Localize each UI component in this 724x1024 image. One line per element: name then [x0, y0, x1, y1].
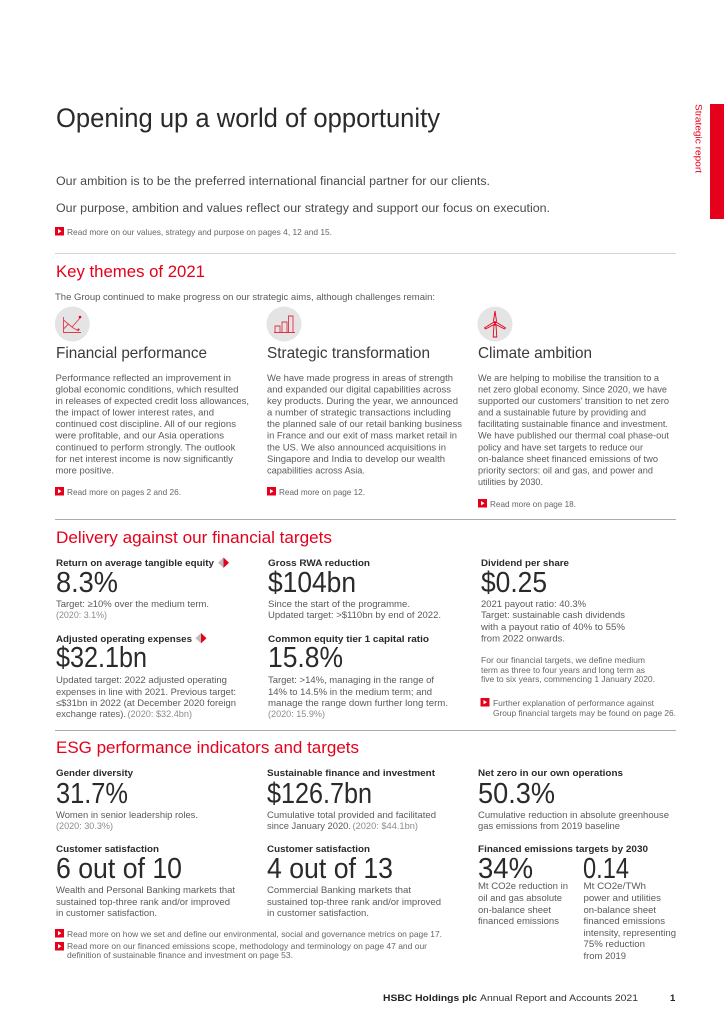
title: Opening up a world of opportunity [56, 103, 441, 133]
metric: net zero: Cumulative reduction in absolute greenhouse [478, 810, 669, 820]
column: climate ambition: Climate ambition [478, 345, 592, 362]
read more link: values: Read more on our values, strategy and purpose on pages 4, 12 and 15. [67, 228, 332, 237]
metric: gross RWA reduction: Updated target: >$110bn by end of 2022. [268, 610, 441, 620]
side tab: Strategic report [694, 104, 704, 174]
metric: financed emissions targets: on-balance sheet [584, 905, 656, 915]
column: climate ambition: priority sectors: oil and gas, and power and [478, 465, 653, 475]
metric: customer satisfaction, commercial: Customer satisfaction [267, 844, 370, 854]
metric: financed emissions targets: financed emissions [478, 916, 559, 926]
metric: dividend per share: $0.25 [481, 567, 547, 599]
column: strategic transformation: capabilities across Asia. [267, 465, 365, 475]
metric: financed emissions targets: financed emissions [584, 916, 665, 926]
metric: sustainable finance: (2020: $44.1bn) [352, 821, 418, 831]
metric: customer satisfaction, wealth: Customer satisfaction [56, 844, 159, 854]
intro text: Our purpose, ambition and values reflect our strategy and support our focus on execution. [56, 203, 550, 215]
metric: financed emissions targets: from 2019 [584, 951, 626, 961]
panel: key themes of 2021 [54, 262, 669, 509]
metric: financed emissions targets [478, 844, 676, 961]
footer: Annual Report and Accounts 2021 [480, 993, 638, 1004]
metric: financed emissions targets: on-balance sheet [478, 905, 551, 915]
metric: adjusted operating expenses: (2020: $32.4bn) [128, 709, 192, 719]
metric: return on tangible equity: 8.3% [56, 567, 118, 599]
read more link: financed emissions: definition of sustainable finance and investment on page 53. [67, 951, 293, 960]
metric: customer satisfaction, wealth: in customer satisfaction. [56, 908, 157, 918]
note: medium and long term definition: term as three to four years and long term as [481, 666, 645, 675]
column: strategic transformation: and expanded our digital capabilities across [267, 385, 451, 395]
panel: ESG performance indicators [55, 738, 676, 961]
metric: financed emissions targets: power and utilities [584, 893, 661, 903]
column: strategic transformation [267, 345, 462, 475]
read more link: page 26: Group financial targets may be found on page 26. [493, 709, 676, 718]
metric: adjusted operating expenses: expenses in line with 2021. Previous target: [56, 687, 236, 697]
column: financial performance: the impact of lower interest rates, and [56, 408, 214, 418]
metric: sustainable finance: Cumulative total provided and facilitated [267, 810, 436, 820]
column: financial performance: global economic conditions, which resulted [56, 385, 238, 395]
column: financial performance: continued to perform strongly. The outlook [56, 442, 236, 452]
metric: gross RWA reduction: Since the start of the programme. [268, 599, 410, 609]
metric: common equity tier 1: Common equity tier 1 capital ratio [268, 634, 430, 644]
note: medium and long term definition: five to six years, commencing 1 January 2020. [481, 675, 655, 684]
note: medium and long term definition [481, 656, 655, 684]
heading: key themes: Key themes of 2021 [56, 262, 205, 281]
metric: return on tangible equity: (2020: 3.1%) [56, 610, 107, 620]
metric: common equity tier 1 [268, 634, 448, 719]
metric: financed emissions targets: Financed emissions targets by 2030 [478, 844, 648, 854]
column: climate ambition: We are helping to mobilise the transition to a [478, 373, 660, 383]
read more link: page 18: Read more on page 18. [490, 500, 576, 509]
column: climate ambition [478, 345, 669, 487]
metric: adjusted operating expenses: exchange rates). [56, 709, 126, 719]
column: climate ambition: supported our customers’ transition to net zero [478, 396, 669, 406]
metric: net zero [478, 768, 669, 831]
metric: dividend per share: Dividend per share [481, 558, 569, 568]
metric: gross RWA reduction: $104bn [268, 567, 356, 599]
panel: delivery against financial targets [56, 528, 676, 719]
metric: gross RWA reduction: Gross RWA reduction [268, 558, 370, 568]
metric: financed emissions targets: oil and gas absolute [478, 893, 562, 903]
column: climate ambition: and a sustainable future by providing and [478, 408, 646, 418]
metric: dividend per share: with a payout ratio of 40% to 55% [480, 622, 625, 632]
column: strategic transformation: the US. We also announced acquisitions in [267, 442, 446, 452]
metric: dividend per share: Target: sustainable cash dividends [481, 610, 625, 620]
metric: sustainable finance: Sustainable finance and investment [267, 768, 435, 778]
metric: dividend per share: 2021 payout ratio: 40.3% [481, 599, 586, 609]
metric: sustainable finance: $126.7bn [267, 778, 372, 810]
column: strategic transformation: We have made progress in areas of strength [267, 373, 453, 383]
column: climate ambition: utilities by 2030. [478, 477, 543, 487]
metric: adjusted operating expenses: $32.1bn [56, 642, 147, 674]
metric: customer satisfaction, commercial [267, 844, 441, 918]
metric: customer satisfaction, commercial: sustained top-three rank and/or improved [267, 897, 441, 907]
column: financial performance: in releases of expected credit loss allowances, [56, 396, 249, 406]
metric: sustainable finance [267, 768, 436, 831]
column: strategic transformation: the planned sale of our retail banking business [267, 419, 462, 429]
metric: dividend per share [480, 558, 625, 644]
side tab [694, 104, 724, 219]
heading: delivery: Delivery against our financial targets [56, 528, 332, 547]
metric: financed emissions targets: 0.14 [583, 853, 629, 885]
read more link: page 26: Further explanation of performance against [493, 699, 655, 708]
intro text [56, 176, 550, 215]
column: financial performance: more positive. [56, 465, 114, 475]
column: strategic transformation: a number of strategic transactions including [267, 408, 451, 418]
column: financial performance: Performance reflected an improvement in [56, 373, 231, 383]
metric: financed emissions targets: intensity, representing [584, 928, 676, 938]
icon: line chart [55, 306, 90, 342]
column: climate ambition: We have published our thermal coal phase-out [478, 431, 669, 441]
footer: HSBC Holdings plc [383, 993, 477, 1004]
metric: adjusted operating expenses: ≤$31bn in 2022 (at December 2020 foreign [56, 698, 236, 708]
footer: 1 [670, 993, 676, 1004]
metric: return on tangible equity: Return on average tangible equity [56, 558, 214, 568]
column: strategic transformation: in France and our exit of mass market retail in [267, 431, 457, 441]
column: strategic transformation: Singapore and India to develop our wealth [267, 454, 445, 464]
metric: net zero: Net zero in our own operations [478, 768, 623, 778]
metric: return on tangible equity: Target: ≥10% over the medium term. [56, 599, 209, 609]
read more link: ESG metrics: Read more on how we set and define our environmental, social and governance metrics on page 17. [67, 930, 442, 939]
icon: bar chart [266, 306, 302, 342]
column: financial performance [54, 345, 249, 475]
metric: common equity tier 1: (2020: 15.9%) [268, 709, 325, 719]
metric: gender diversity: Gender diversity [56, 768, 133, 778]
read more link: pages 2 and 26: Read more on pages 2 and 26. [67, 488, 181, 497]
column: strategic transformation: key products. During the year, we announced [267, 396, 458, 406]
metric: customer satisfaction, wealth [56, 844, 235, 918]
column: climate ambition: policy and have set targets to reduce our [478, 442, 643, 452]
metric: customer satisfaction, commercial: 4 out of 13 [267, 853, 393, 885]
column: climate ambition: facilitating sustainable finance and investment. [478, 419, 668, 429]
metric: net zero: gas emissions from 2019 baseline [478, 821, 620, 831]
column: financial performance: Financial performance [56, 345, 207, 362]
metric: customer satisfaction, commercial: Commercial Banking markets that [267, 885, 411, 895]
metric: adjusted operating expenses: Updated target: 2022 adjusted operating [56, 675, 227, 685]
metric: sustainable finance: since January 2020. [267, 821, 351, 831]
metric: common equity tier 1: 15.8% [268, 642, 343, 674]
footer [383, 993, 676, 1004]
intro text: Our ambition is to be the preferred international financial partner for our clients. [56, 176, 490, 188]
metric: gender diversity: Women in senior leadership roles. [56, 810, 198, 820]
column: climate ambition: on-balance sheet financed emissions of two [478, 454, 658, 464]
metric: common equity tier 1: manage the range down further long term. [268, 698, 448, 708]
metric: common equity tier 1: Target: >14%, managing in the range of [268, 675, 434, 685]
metric: return on tangible equity [56, 558, 229, 620]
column: climate ambition: net zero global economy. Since 2020, we have [478, 385, 667, 395]
metric: gross RWA reduction [268, 558, 441, 620]
metric: dividend per share: from 2022 onwards. [481, 634, 565, 644]
column: financial performance: continued cost discipline. All of our regions [56, 419, 236, 429]
metric: financed emissions targets: Mt CO2e/TWh [584, 881, 646, 891]
metric: gender diversity [56, 768, 198, 831]
read more link: financed emissions [55, 942, 427, 960]
read more link: financed emissions: Read more on our financed emissions scope, methodology and terminology on page 47 and our [67, 942, 427, 951]
metric: financed emissions targets: 34% [478, 853, 533, 885]
metric: financed emissions targets: 75% reduction [584, 939, 645, 949]
key themes intro: The Group continued to make progress on our strategic aims, although challenges remain: [55, 292, 435, 302]
metric: customer satisfaction, wealth: 6 out of 10 [56, 853, 182, 885]
metric: financed emissions targets: Mt CO2e reduction in [478, 881, 568, 891]
heading: ESG: ESG performance indicators and targets [56, 738, 359, 757]
metric: gender diversity: 31.7% [56, 778, 128, 810]
metric: common equity tier 1: 14% to 14.5% in the medium term; and [268, 687, 432, 697]
column: financial performance: were profitable, and our Asia operations [54, 431, 224, 441]
metric: customer satisfaction, commercial: in customer satisfaction. [267, 908, 369, 918]
column: financial performance: for net interest income is now significantly [56, 454, 233, 464]
metric: customer satisfaction, wealth: Wealth and Personal Banking markets that [56, 885, 235, 895]
metric: adjusted operating expenses [56, 633, 236, 719]
read more link: page 26 [480, 698, 676, 718]
note: medium and long term definition: For our financial targets, we define medium [481, 656, 645, 665]
metric: gender diversity: (2020: 30.3%) [56, 821, 113, 831]
metric: customer satisfaction, wealth: sustained top-three rank and/or improved [56, 897, 230, 907]
icon: wind turbine [478, 306, 512, 342]
metric: net zero: 50.3% [478, 778, 555, 810]
read more link: page 12: Read more on page 12. [279, 488, 365, 497]
column: strategic transformation: Strategic transformation [267, 345, 430, 362]
metric: adjusted operating expenses: Adjusted operating expenses [56, 634, 192, 644]
